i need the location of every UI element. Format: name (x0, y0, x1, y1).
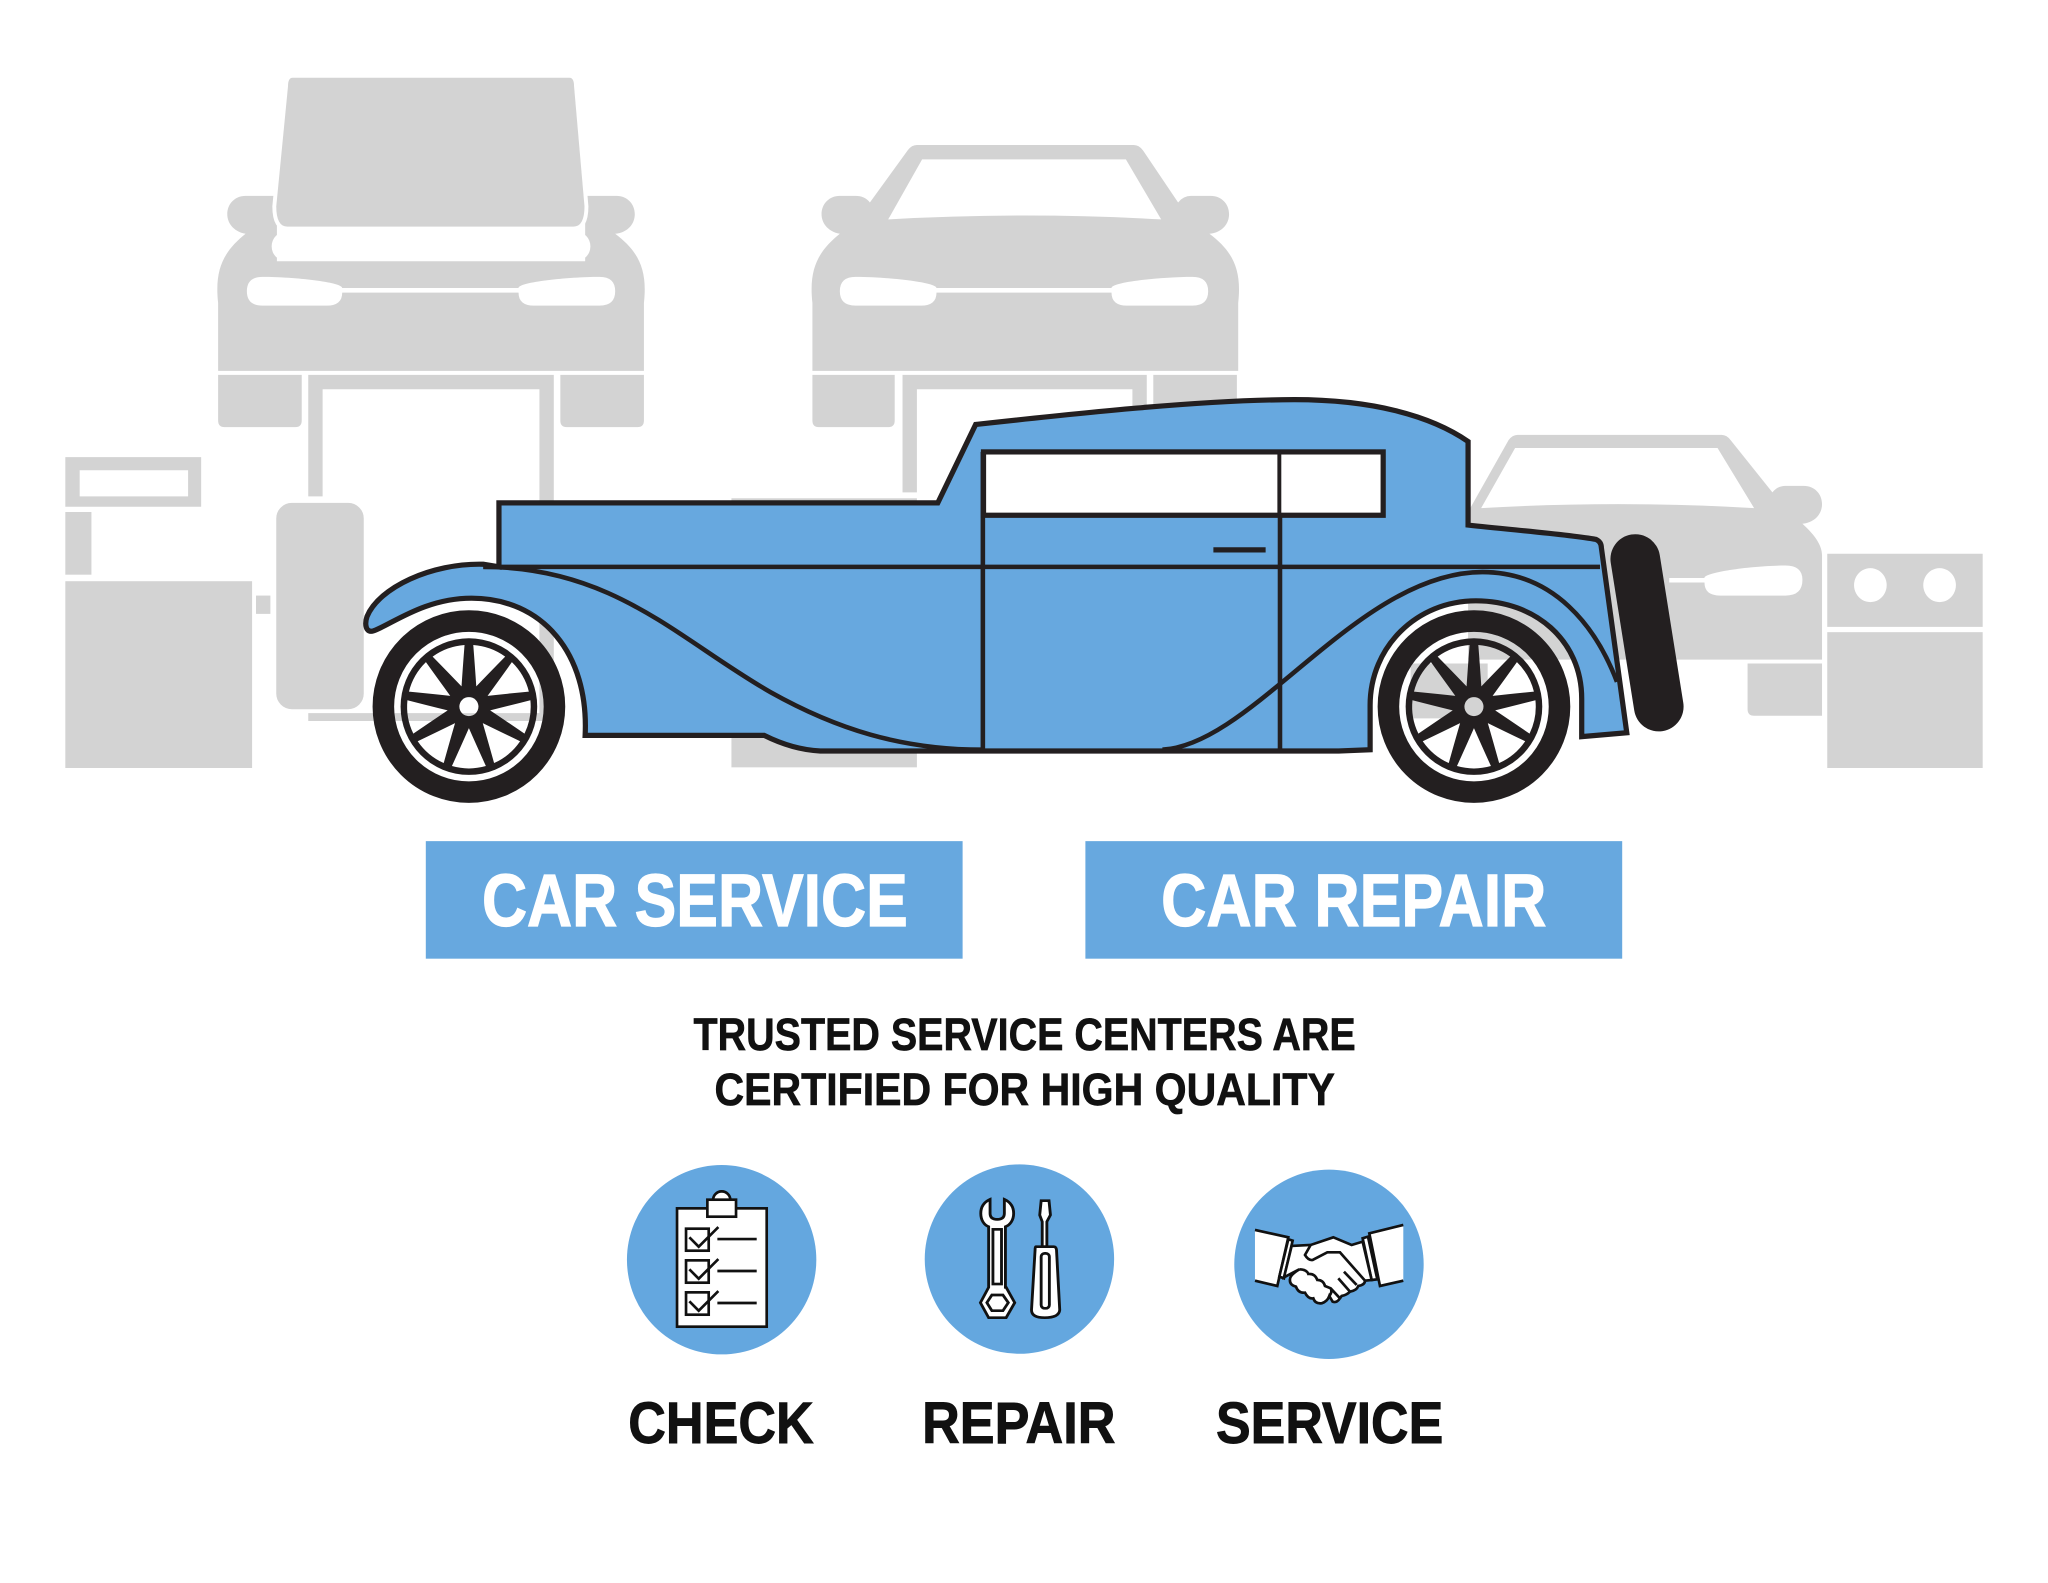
car rear bumper (1635, 559, 1659, 707)
grey equipment: left console (65, 457, 270, 768)
tagline: TRUSTED SERVICE CENTERS ARE (694, 1009, 1356, 1060)
label: service: SERVICE (1216, 1391, 1443, 1456)
tagline (694, 1009, 1356, 1115)
rear wheel (1388, 621, 1560, 792)
grey car on lift with open hood (217, 76, 645, 721)
banner: car repair: CAR REPAIR (1161, 859, 1546, 942)
grey car at right behind blue car (1411, 435, 1822, 718)
label: check: CHECK (628, 1391, 814, 1456)
label: repair: REPAIR (922, 1391, 1115, 1456)
banner: car service (426, 841, 963, 959)
banner: car service: CAR SERVICE (482, 859, 908, 942)
blue vintage car (366, 400, 1659, 792)
grey equipment: right console (1827, 554, 1983, 768)
icon: check clipboard (627, 1165, 816, 1354)
car body contour lines (483, 452, 1617, 751)
grey car on second lift (731, 145, 1239, 767)
car body (366, 400, 1627, 751)
icon: service handshake (1234, 1170, 1424, 1359)
banner: car repair (1085, 841, 1622, 959)
tagline: CERTIFIED FOR HIGH QUALITY (714, 1064, 1335, 1115)
front wheel (383, 621, 554, 792)
car windows (984, 452, 1383, 515)
icon: repair tools (925, 1164, 1114, 1354)
